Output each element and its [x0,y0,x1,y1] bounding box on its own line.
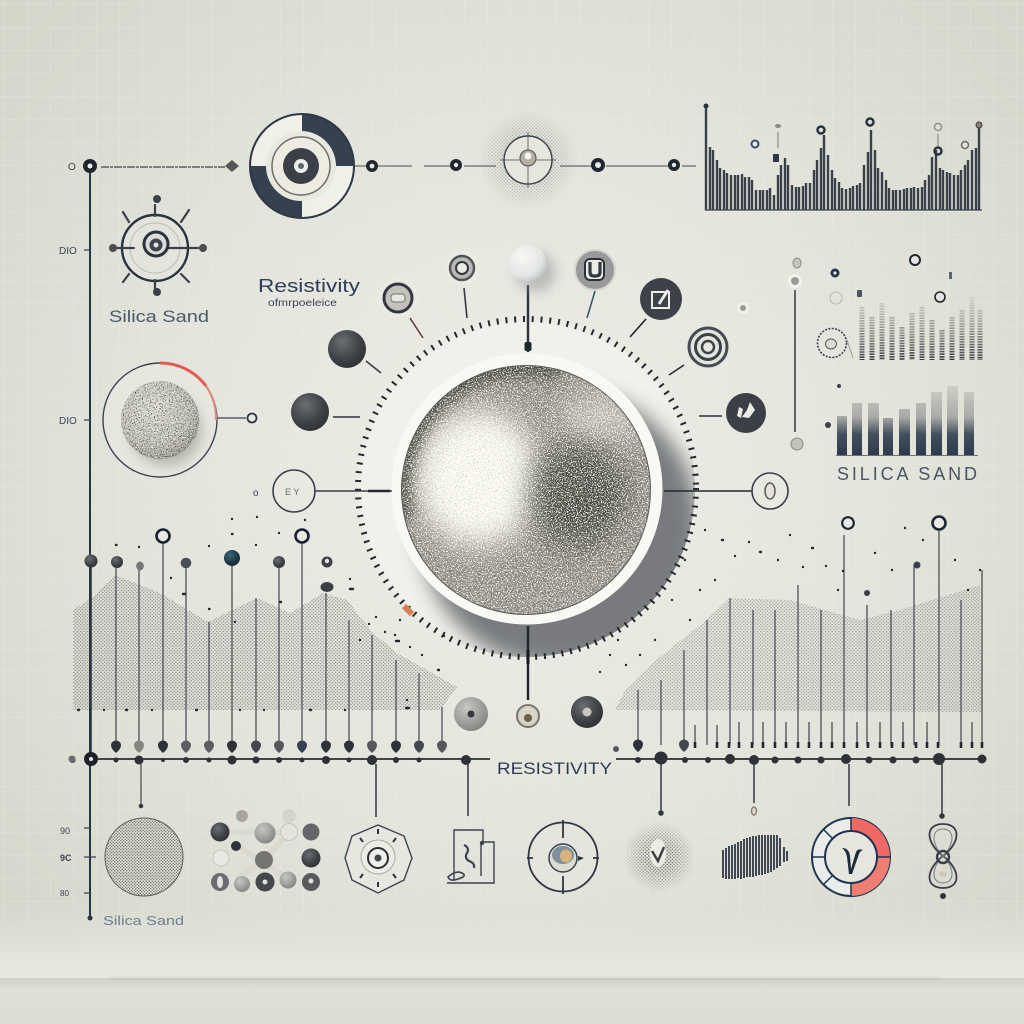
horizontal axis left [68,740,490,766]
axis labels left: 90 [60,826,70,836]
axis labels left: DIO [59,246,77,257]
left vertical axis [84,172,96,920]
axis labels left: 9C [60,853,72,863]
comb chart with ring [818,255,980,360]
icon: spiral badge [669,328,727,375]
right ring connector [664,473,788,509]
icon: small ring top right [737,302,749,314]
icon: dark shape badge [699,393,766,433]
bar chart [825,384,978,456]
icon: wave bars [723,835,787,879]
icon: molecule cluster [210,809,320,892]
lollipop stems right [638,530,982,745]
left ring connector: E Y [285,487,299,497]
lollipop stems left [91,543,442,752]
spectrum chart [704,104,982,210]
heading: resistivity [258,276,360,309]
panel: sand sphere gauge [103,363,256,477]
label: silica sand: Silica Sand [109,307,209,326]
icon: U badge [575,250,615,318]
icon: dark ball left [291,393,360,431]
icon: red segmented ring [812,818,890,896]
central bowl of silica sand [359,321,700,668]
top connector nodes [354,158,696,172]
label: silica sand chart: SILICA SAND [837,464,977,484]
label: silica sand bottom: Silica Sand [103,913,184,928]
axis labels left: DIO [59,416,77,427]
icon: compass wheel [109,195,207,296]
scattered particles left [78,517,444,710]
lollipop heads left [84,530,334,592]
top node and dashed connector [83,159,239,173]
axis labels left: 80 [60,889,69,898]
stipple area left [73,575,457,710]
icon: figure eight [930,824,956,899]
dial tick ring [358,319,696,657]
heading: resistivity axis label: RESISTIVITY [497,759,612,778]
icon: white sphere [509,245,556,292]
lollipop heads right [842,516,946,596]
axis labels left: O [69,755,76,765]
axis labels left [59,162,77,898]
left ring connector [253,470,392,512]
icon: ball hexagon left [378,278,423,338]
icons below bowl [454,696,603,731]
heading: resistivity: Resistivity [258,276,360,296]
icon: stippled sphere [105,818,183,896]
icon: crosshair ring [527,820,599,894]
icon: checkbox badge [630,278,682,337]
right vertical indicator [788,258,803,450]
horizontal axis right [613,740,986,765]
icon: target with dust halo [482,113,574,207]
top pointer [524,285,532,352]
icon: concentric badge [444,250,480,318]
bottom pointer [527,626,529,700]
stipple area right [615,585,982,712]
icon: document glyph [447,830,494,883]
drop connectors [140,764,944,818]
icon: ringed target [345,825,412,893]
icon: dark ball upper left [328,330,381,373]
axis labels left: O [68,162,76,173]
left ring connector: o [253,488,259,499]
scattered particles right [600,528,980,672]
icon: segmented donut [250,114,354,218]
heading: resistivity: ofmrpoeleice [268,298,338,309]
icon: dust burst [624,823,693,890]
